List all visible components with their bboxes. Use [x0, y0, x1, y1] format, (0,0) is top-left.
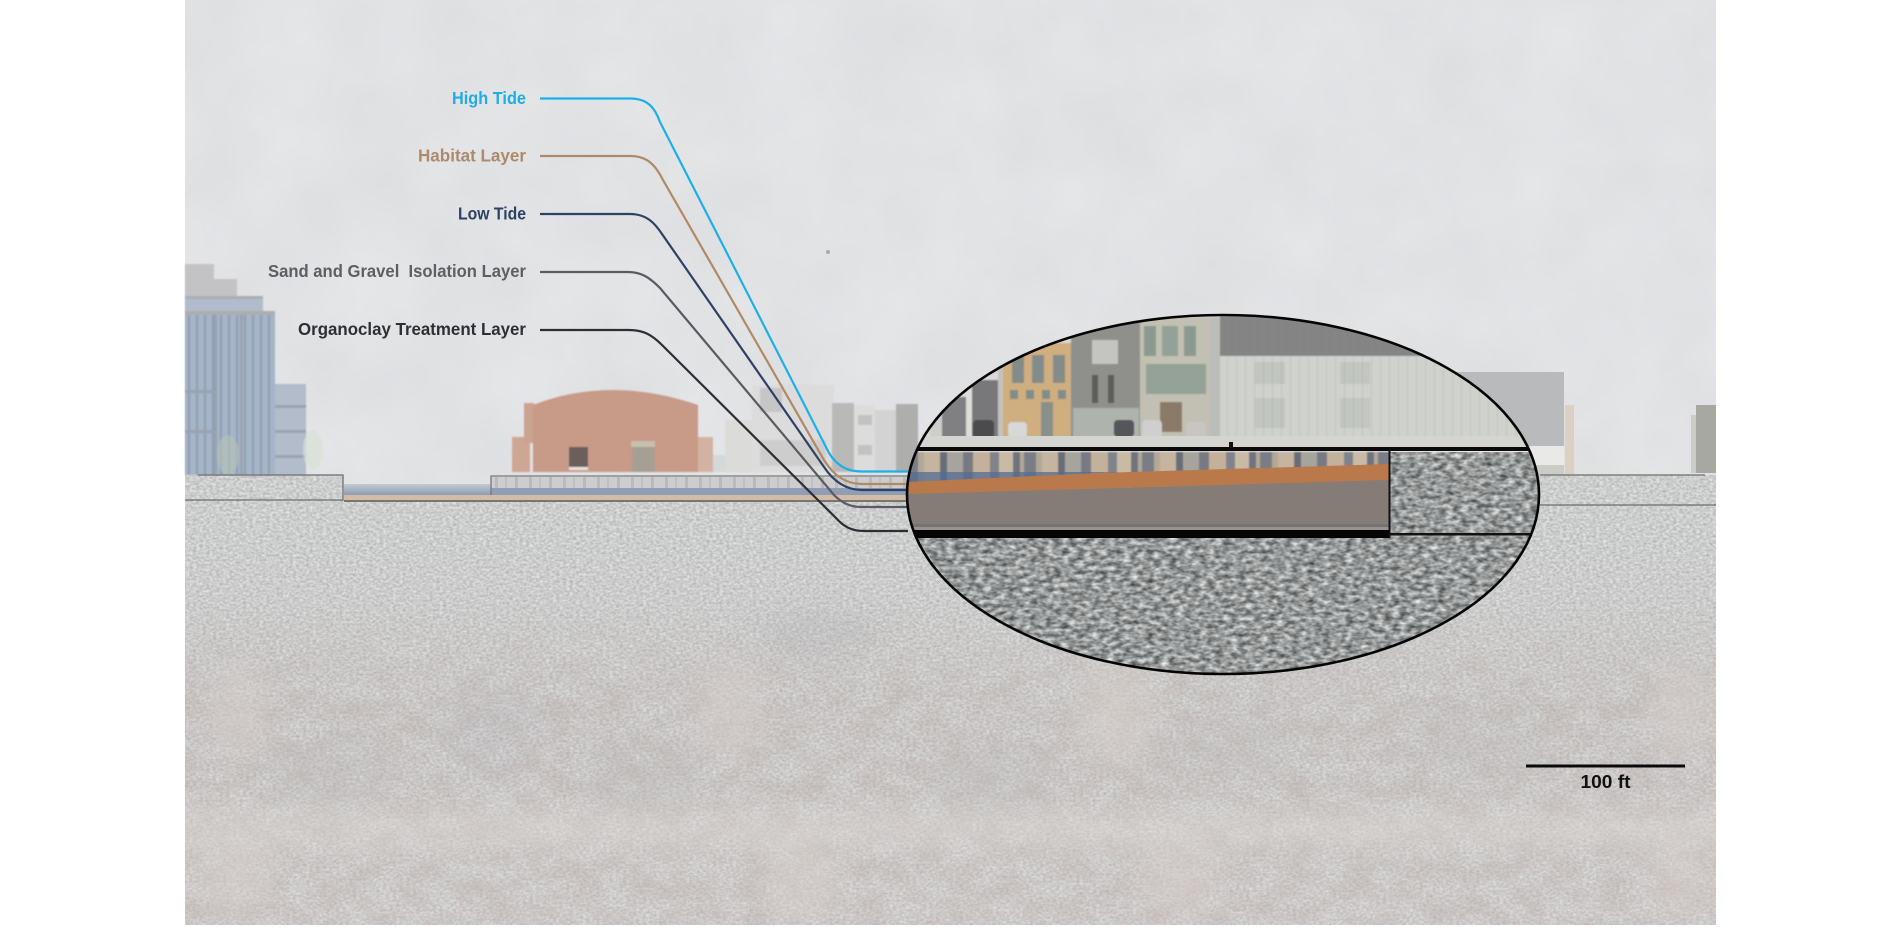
lens: water band — [909, 472, 1119, 482]
background: concrete sky — [185, 0, 1716, 505]
leader: low tide — [540, 214, 908, 490]
leader: habitat layer — [540, 156, 908, 484]
label: high tide: High Tide — [452, 88, 526, 108]
water and cap layers in the channel — [344, 476, 909, 502]
skyline: left apartment tower — [185, 264, 323, 475]
lens: parked cars — [973, 420, 1206, 438]
scale bar: 100 ft — [1580, 772, 1630, 792]
lens: sidewalk — [920, 436, 1526, 447]
lens: sand and gravel isolation layer — [908, 480, 1388, 524]
shoreline and ground lines — [185, 475, 1716, 505]
lens: section lines — [906, 442, 1540, 538]
skyline: right buildings — [1457, 372, 1716, 475]
ground: gravel and rubble fill — [150, 475, 1750, 925]
scale bar — [1526, 764, 1685, 792]
label: organoclay treatment layer: Organoclay Treatment Layer — [298, 319, 526, 339]
lens: habitat layer — [906, 464, 1389, 495]
leader: organoclay treatment layer — [540, 330, 908, 531]
label: habitat layer: Habitat Layer — [418, 146, 526, 166]
label: low tide: Low Tide — [458, 204, 526, 224]
magnified detail lens — [906, 315, 1540, 675]
lens: pier piles above water — [906, 452, 1390, 492]
leader: sand and gravel isolation layer — [540, 272, 908, 507]
leader: high tide — [540, 98, 908, 472]
lens: gravel right of channel — [1390, 452, 1540, 534]
lens: gravel below cap — [906, 535, 1540, 675]
skyline: distant apartment blocks — [725, 385, 918, 472]
label: sand and gravel isolation layer: Sand and Gravel Isolation Layer — [268, 261, 526, 281]
skyline: brick warehouse — [512, 390, 727, 472]
lens: street buildings — [926, 316, 1520, 436]
